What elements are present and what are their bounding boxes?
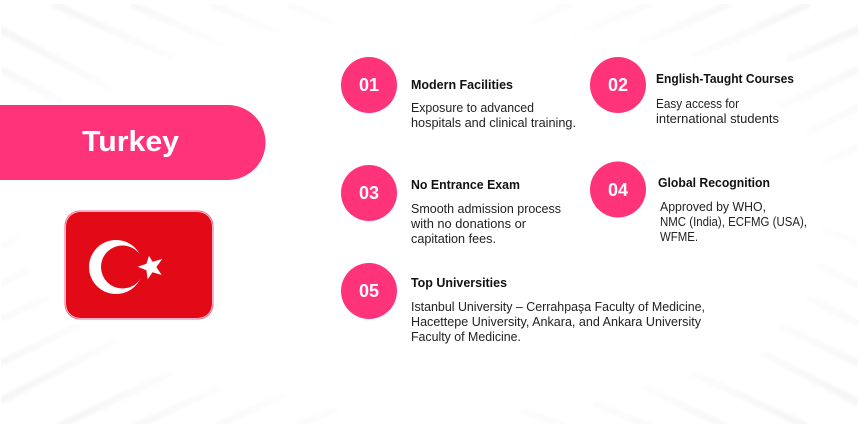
item 05: Top Universities: Hacettepe University, Ankara, and Ankara University: [411, 315, 702, 329]
item 01: Modern Facilities: [341, 57, 576, 130]
item 04: Global Recognition: Approved by WHO,: [660, 200, 766, 214]
item 03: No Entrance Exam: capitation fees.: [411, 232, 496, 246]
item 03: No Entrance Exam: [341, 165, 561, 246]
icon: Turkish flag: [65, 211, 213, 319]
item 04: Global Recognition: NMC (India), ECFMG (USA),: [660, 215, 807, 229]
item 05: Top Universities: 05: [359, 281, 379, 301]
title banner: Turkey: [82, 126, 179, 158]
item 04: Global Recognition: WFME.: [660, 230, 698, 244]
title banner: [0, 105, 266, 180]
item 03: No Entrance Exam: with no donations or: [410, 217, 526, 231]
item 03: No Entrance Exam: 03: [359, 183, 379, 203]
item 04: Global Recognition: 04: [608, 180, 628, 200]
item 01: Modern Facilities: Modern Facilities: [411, 78, 513, 92]
item 05: Top Universities: Faculty of Medicine.: [411, 330, 521, 344]
item 02: English-Taught Courses: English-Taught Courses: [656, 72, 794, 86]
item 05: Top Universities: Top Universities: [411, 276, 507, 290]
item 01: Modern Facilities: hospitals and clinical training.: [411, 116, 576, 130]
item 05: Top Universities: [341, 263, 705, 344]
item 03: No Entrance Exam: Smooth admission process: [411, 202, 561, 216]
item 01: Modern Facilities: Exposure to advanced: [411, 101, 534, 115]
item 03: No Entrance Exam: No Entrance Exam: [411, 178, 520, 192]
item 04: Global Recognition: Global Recognition: [658, 176, 770, 190]
item 05: Top Universities: Istanbul University – Cerrahpaşa Faculty of Medicine,: [411, 300, 705, 314]
item 02: English-Taught Courses: Easy access for: [656, 97, 739, 111]
item 02: English-Taught Courses: [590, 57, 794, 126]
item 04: Global Recognition: [590, 162, 807, 244]
item 02: English-Taught Courses: international students: [656, 112, 779, 126]
item 01: Modern Facilities: 01: [359, 75, 379, 95]
item 02: English-Taught Courses: 02: [608, 75, 628, 95]
